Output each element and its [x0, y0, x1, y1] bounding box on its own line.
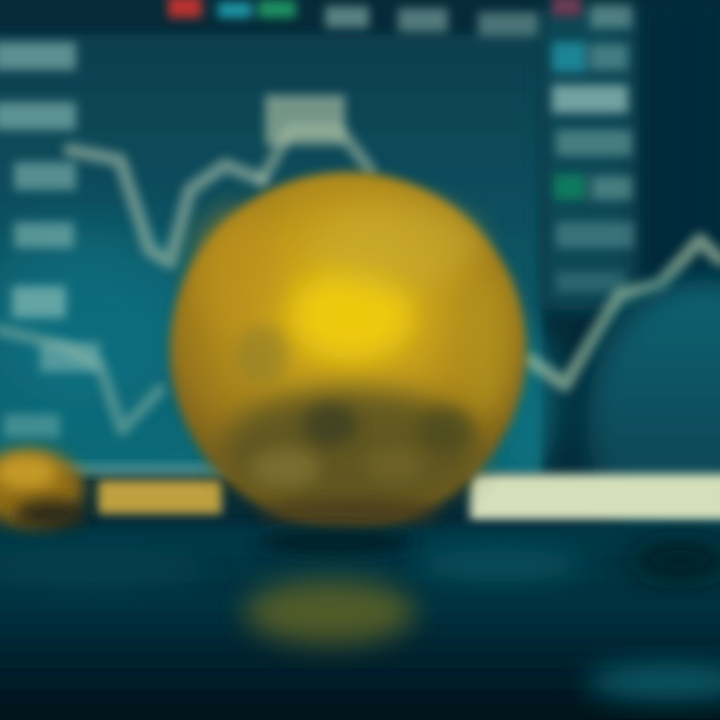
panel: chart screen — [0, 0, 720, 474]
reflections on floor — [0, 528, 720, 700]
glowing strip: pale and gold — [60, 464, 720, 520]
icon: small gold coin at left — [0, 450, 86, 528]
icon: large gold sphere — [170, 172, 526, 528]
line chart: price line behind sphere — [0, 95, 720, 430]
legend: top colour markers — [168, 0, 632, 36]
teal hill at right — [587, 280, 720, 560]
floor — [0, 526, 720, 720]
left axis labels — [0, 42, 100, 438]
right axis labels — [552, 42, 634, 292]
